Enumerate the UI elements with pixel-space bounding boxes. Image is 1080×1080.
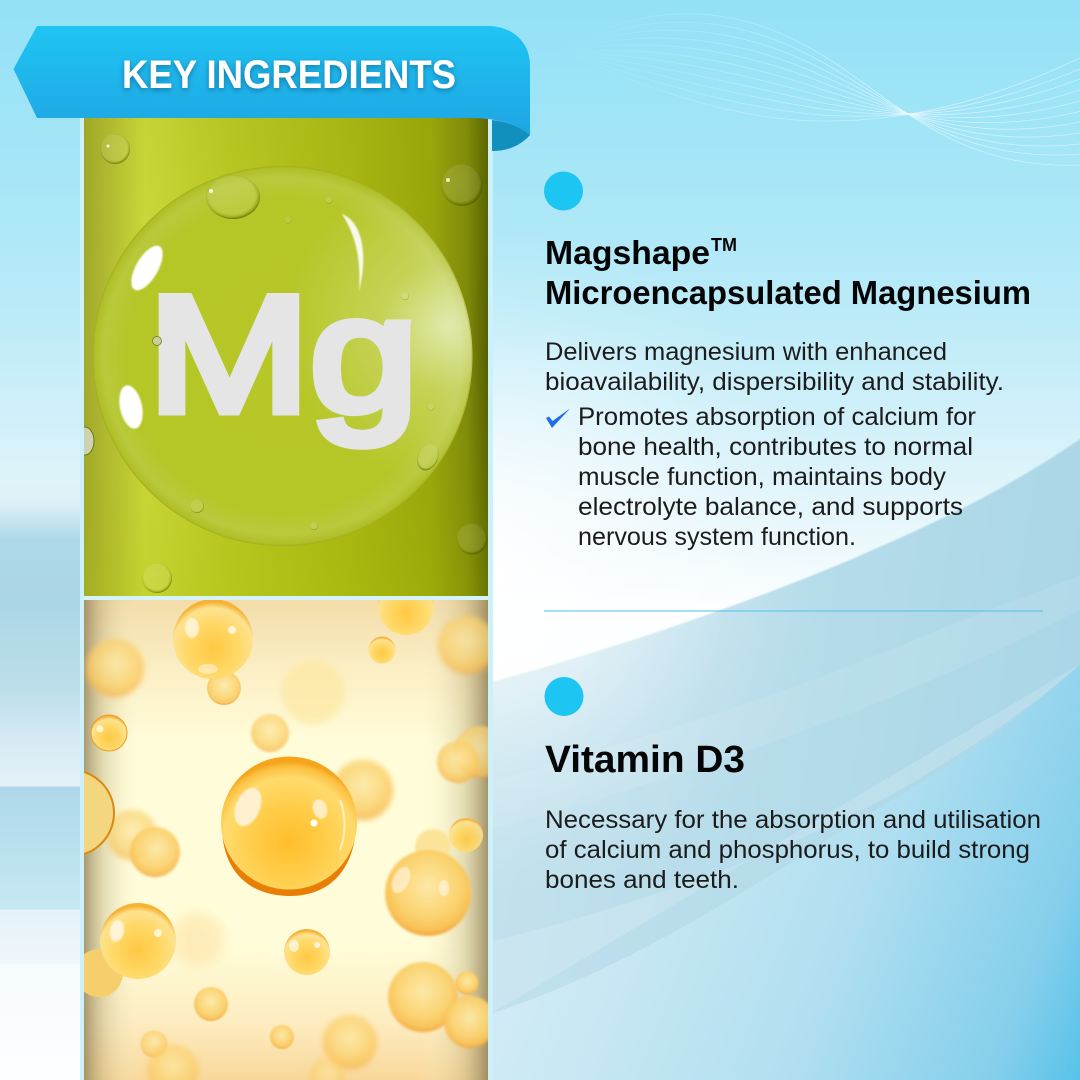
divider between images <box>84 596 488 600</box>
bullet dot <box>544 677 584 716</box>
description: bioavailability, dispersibility and stability. <box>545 368 1004 396</box>
benefits list: nervous system function. <box>578 523 856 551</box>
bubble at lower right highlights <box>388 864 449 896</box>
magnesium symbol: Mg <box>148 262 418 446</box>
panel: vitamin D3 oil bubbles image <box>84 600 488 1080</box>
heading: Magshape: Microencapsulated Magnesium <box>545 274 1031 311</box>
left side bands <box>0 480 80 1080</box>
panel: magnesium image <box>76 118 488 596</box>
description <box>545 806 1041 894</box>
description: bones and teeth. <box>545 866 739 894</box>
benefits list: electrolyte balance, and supports <box>578 493 963 521</box>
panel frame <box>80 110 493 1080</box>
description: of calcium and phosphorus, to build strong <box>545 836 1030 864</box>
bullet dot <box>544 172 583 210</box>
description <box>545 338 1004 396</box>
water droplets <box>76 134 488 593</box>
heading: Magshape: Magshape <box>545 234 710 271</box>
section: Magshape <box>544 172 1031 551</box>
sharp oil bubbles <box>84 600 483 997</box>
icon: check mark <box>546 408 570 428</box>
heading: Magshape: TM <box>711 235 737 255</box>
benefits list: muscle function, maintains body <box>578 463 947 491</box>
large magnesium bubble <box>92 166 472 546</box>
benefits list: Promotes absorption of calcium for <box>578 403 976 431</box>
description: Necessary for the absorption and utilisation <box>545 806 1041 834</box>
blurred background bubbles <box>86 616 506 1080</box>
heading: Vitamin D3: Vitamin D3 <box>545 739 745 781</box>
section: Vitamin D3 <box>544 677 1041 894</box>
benefits list <box>578 403 976 551</box>
title: KEY INGREDIENTS <box>122 53 456 97</box>
central oil bubble <box>221 756 357 896</box>
heading: Magshape <box>545 234 1031 311</box>
ribbon fold <box>492 120 530 151</box>
description: Delivers magnesium with enhanced <box>545 338 947 366</box>
ribbon banner <box>14 26 530 135</box>
benefits list: bone health, contributes to normal <box>578 433 973 461</box>
decorative wave lines <box>560 14 1080 165</box>
